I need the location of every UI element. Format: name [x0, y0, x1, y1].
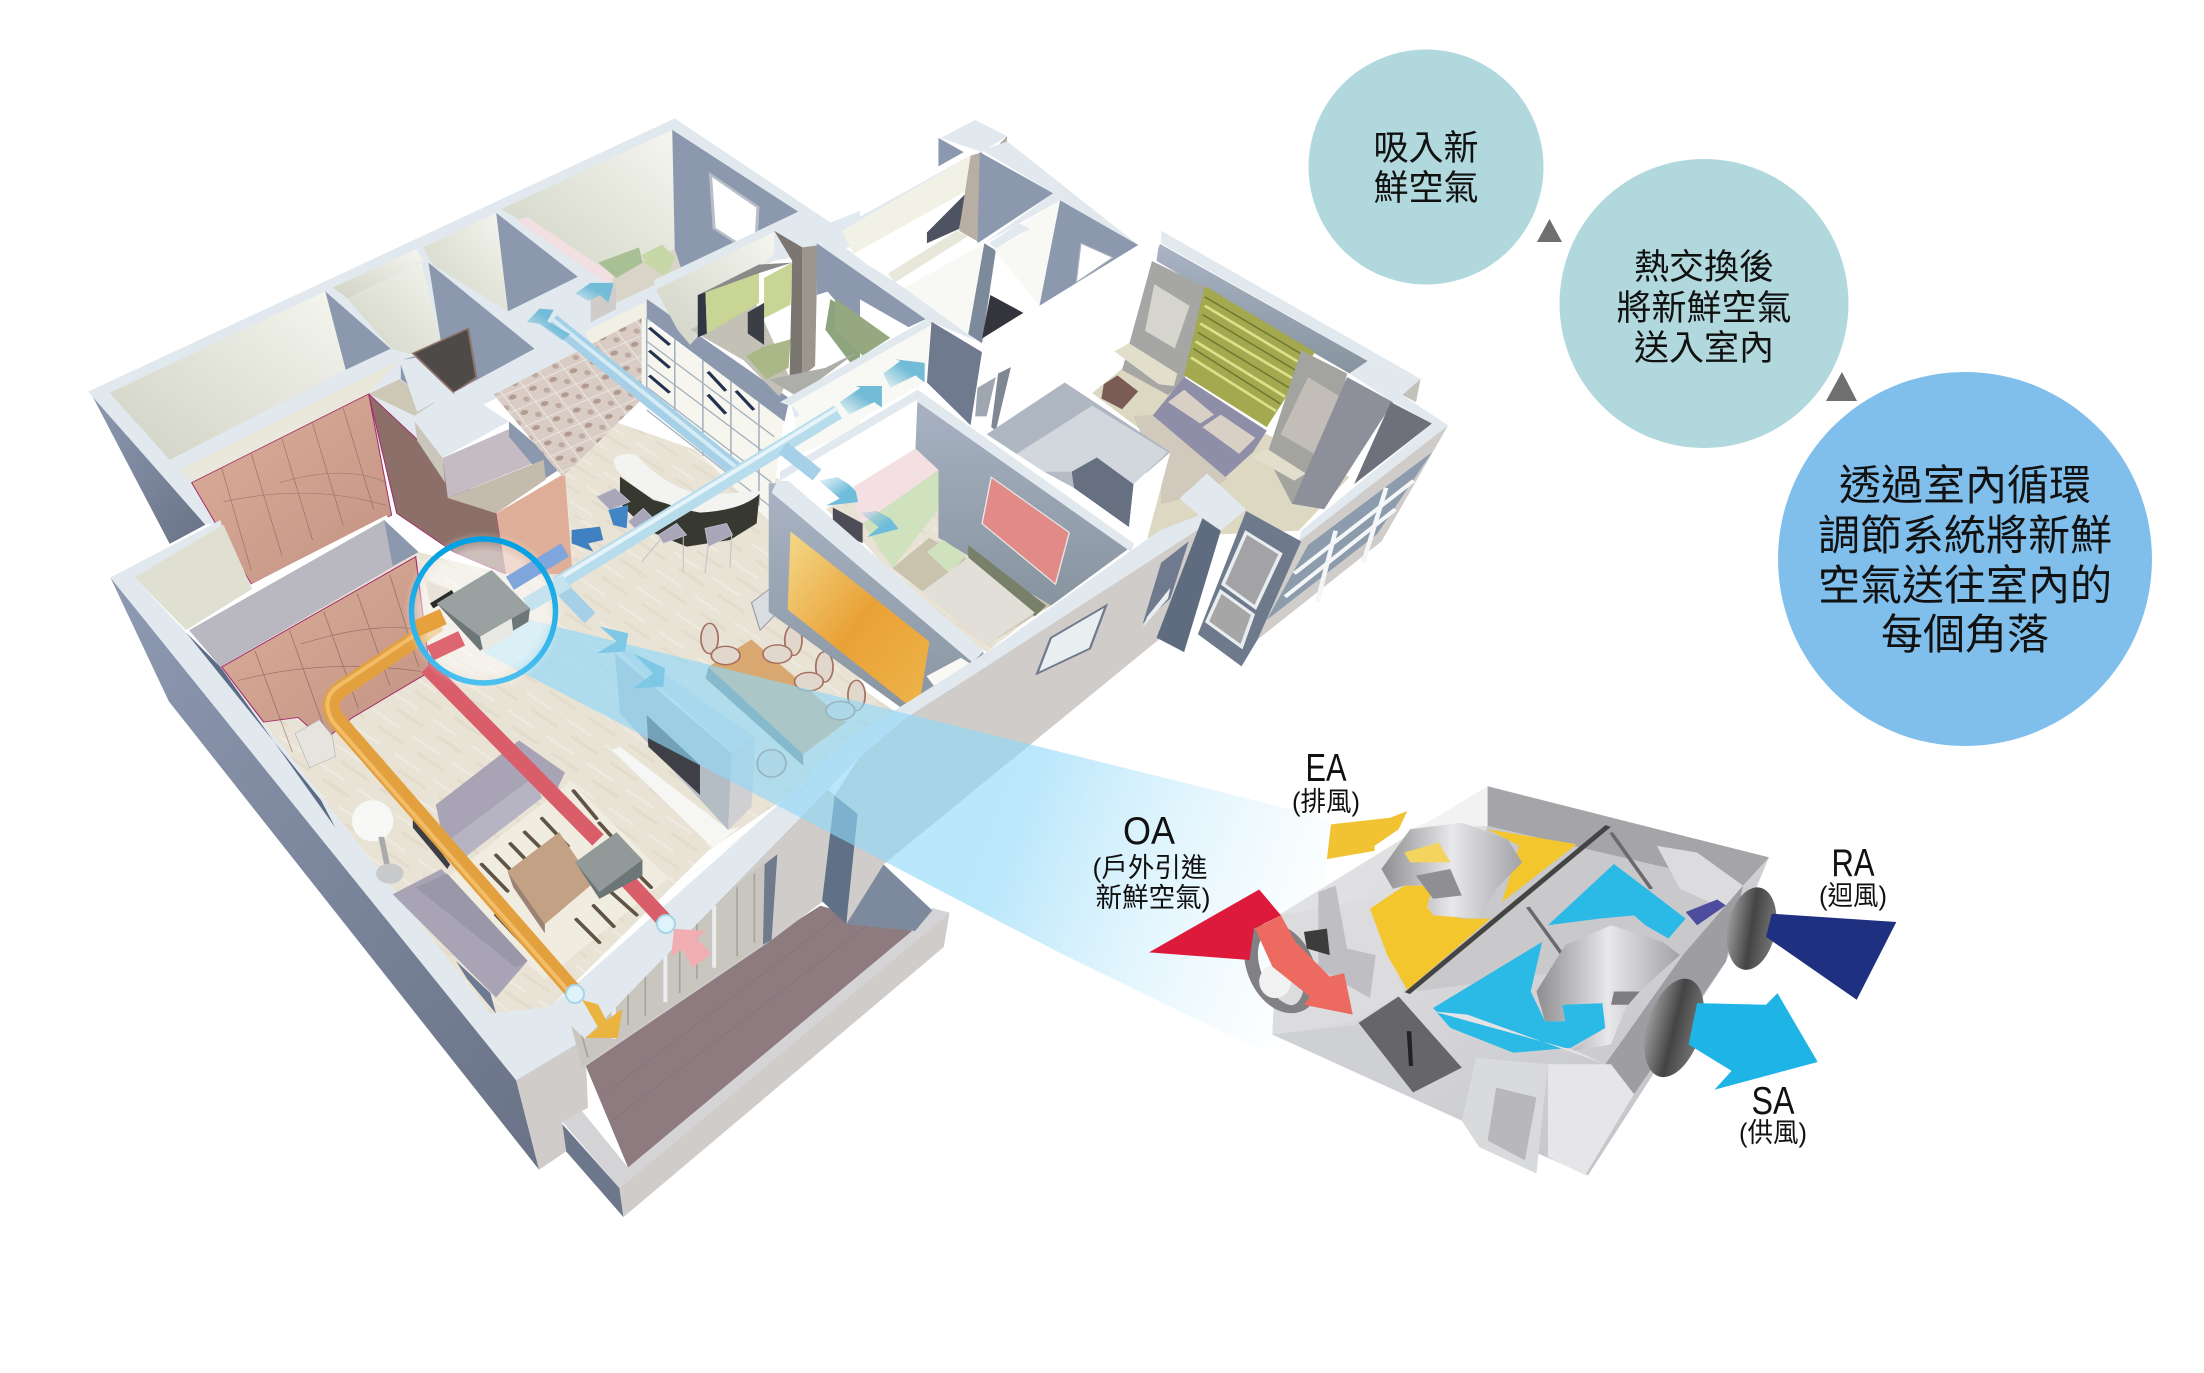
- glass cabinet wall: [642, 318, 784, 521]
- arrow: EA: [1327, 811, 1407, 859]
- bar base: [620, 477, 760, 547]
- arrow marker 2: [1826, 372, 1857, 401]
- label: OA: OA: [1123, 810, 1175, 853]
- master bedroom: [1161, 231, 1421, 379]
- lamp: [352, 800, 393, 841]
- label: EA: (排風): [1292, 787, 1360, 817]
- duct: light blue supply pipes: [552, 319, 838, 618]
- balcony: [582, 906, 912, 1167]
- duct: orange exhaust pipe: [327, 619, 574, 994]
- left port: [1241, 925, 1321, 1012]
- floor: [221, 520, 904, 1014]
- label: SA: [1739, 1080, 1807, 1148]
- step 3 circle: 透過室內循環: [1839, 462, 2091, 509]
- heat exchanger pointer beam: [483, 620, 1330, 1073]
- label: EA: [1292, 747, 1360, 817]
- duct ends: [566, 915, 675, 1003]
- hall wall: [453, 212, 830, 395]
- arrow marker 1: [1537, 219, 1562, 242]
- air flow arrows: [527, 283, 925, 1038]
- furniture: sofas and rug: [447, 782, 668, 979]
- lower box: [1462, 1058, 1548, 1174]
- TV block: [622, 650, 755, 753]
- front diamond panel: [1358, 996, 1462, 1092]
- step 2 circle: [1560, 159, 1848, 448]
- dining: [708, 639, 846, 754]
- label: RA: [1819, 842, 1887, 911]
- fan upper: [1381, 823, 1522, 919]
- bar counter and TV wall: [597, 454, 763, 848]
- label: SA: (供風): [1739, 1118, 1807, 1148]
- room: mid: [333, 249, 423, 299]
- front wall with curtains: [551, 777, 835, 1066]
- divider: [1407, 826, 1608, 993]
- label: SA: SA: [1752, 1080, 1794, 1123]
- front wall windows and bay: [1037, 474, 1301, 674]
- label: OA: [1092, 810, 1210, 913]
- step 3 circle: 調節系統將新鮮: [1818, 512, 2112, 559]
- exploded heat exchanger unit: [1149, 786, 1896, 1175]
- step 2 circle: 熱交換後: [1634, 248, 1774, 287]
- exterior left wall: [110, 577, 539, 1170]
- step 3 circle: 空氣送往室內的: [1818, 562, 2112, 609]
- step 2 circle: 將新鮮空氣: [1616, 289, 1792, 328]
- label: RA: RA: [1832, 842, 1874, 885]
- closet: [987, 382, 1170, 474]
- arrow: SA: [1689, 993, 1818, 1090]
- room: far left: [109, 291, 346, 460]
- patterned wall: [494, 318, 643, 477]
- ports: [1721, 886, 1782, 971]
- step 1 circle: 吸入新: [1373, 129, 1479, 168]
- top annex: [991, 136, 1007, 156]
- central floor: [468, 406, 860, 700]
- floor plan illustration: [88, 118, 1448, 1217]
- highlighted ventilation unit: [404, 531, 567, 691]
- block at hall: [415, 395, 509, 458]
- stools: [597, 488, 733, 547]
- kitchen: [656, 232, 774, 345]
- label: EA: EA: [1306, 747, 1346, 790]
- step 3 circle: 每個角落: [1881, 611, 2049, 658]
- step 1 circle: 鮮空氣: [1373, 169, 1479, 208]
- fan lower: [1536, 925, 1680, 1051]
- duct: red intake pipe: [427, 667, 666, 922]
- label: RA: (迴風): [1819, 881, 1887, 911]
- windows right side: [1258, 425, 1448, 640]
- arrow: OA: [1149, 890, 1281, 960]
- gallery wall and painting: [769, 483, 984, 722]
- yellow flow: [1488, 829, 1577, 902]
- back-left rooms: [88, 118, 860, 700]
- lower living room: [110, 481, 1205, 1217]
- casing: [1272, 786, 1769, 1175]
- label: OA: 新鮮空氣): [1096, 883, 1210, 913]
- blue highlight ring: [412, 539, 556, 683]
- step 1 circle: [1308, 50, 1544, 284]
- cyan flow: [1548, 864, 1686, 939]
- small ventilation unit: [575, 832, 642, 899]
- arrow: RA: [1686, 899, 1726, 925]
- room: top bedroom: [501, 130, 675, 276]
- bar counter top: [613, 454, 763, 513]
- step 2 circle: 送入室內: [1634, 329, 1774, 368]
- right wing: [780, 120, 1448, 652]
- step 3 circle: [1778, 372, 2152, 746]
- label: OA: (戶外引進: [1092, 853, 1208, 883]
- room: pink wardrobe: [170, 349, 448, 469]
- lower bedroom: [826, 449, 1056, 652]
- kitchen back side: [817, 243, 932, 327]
